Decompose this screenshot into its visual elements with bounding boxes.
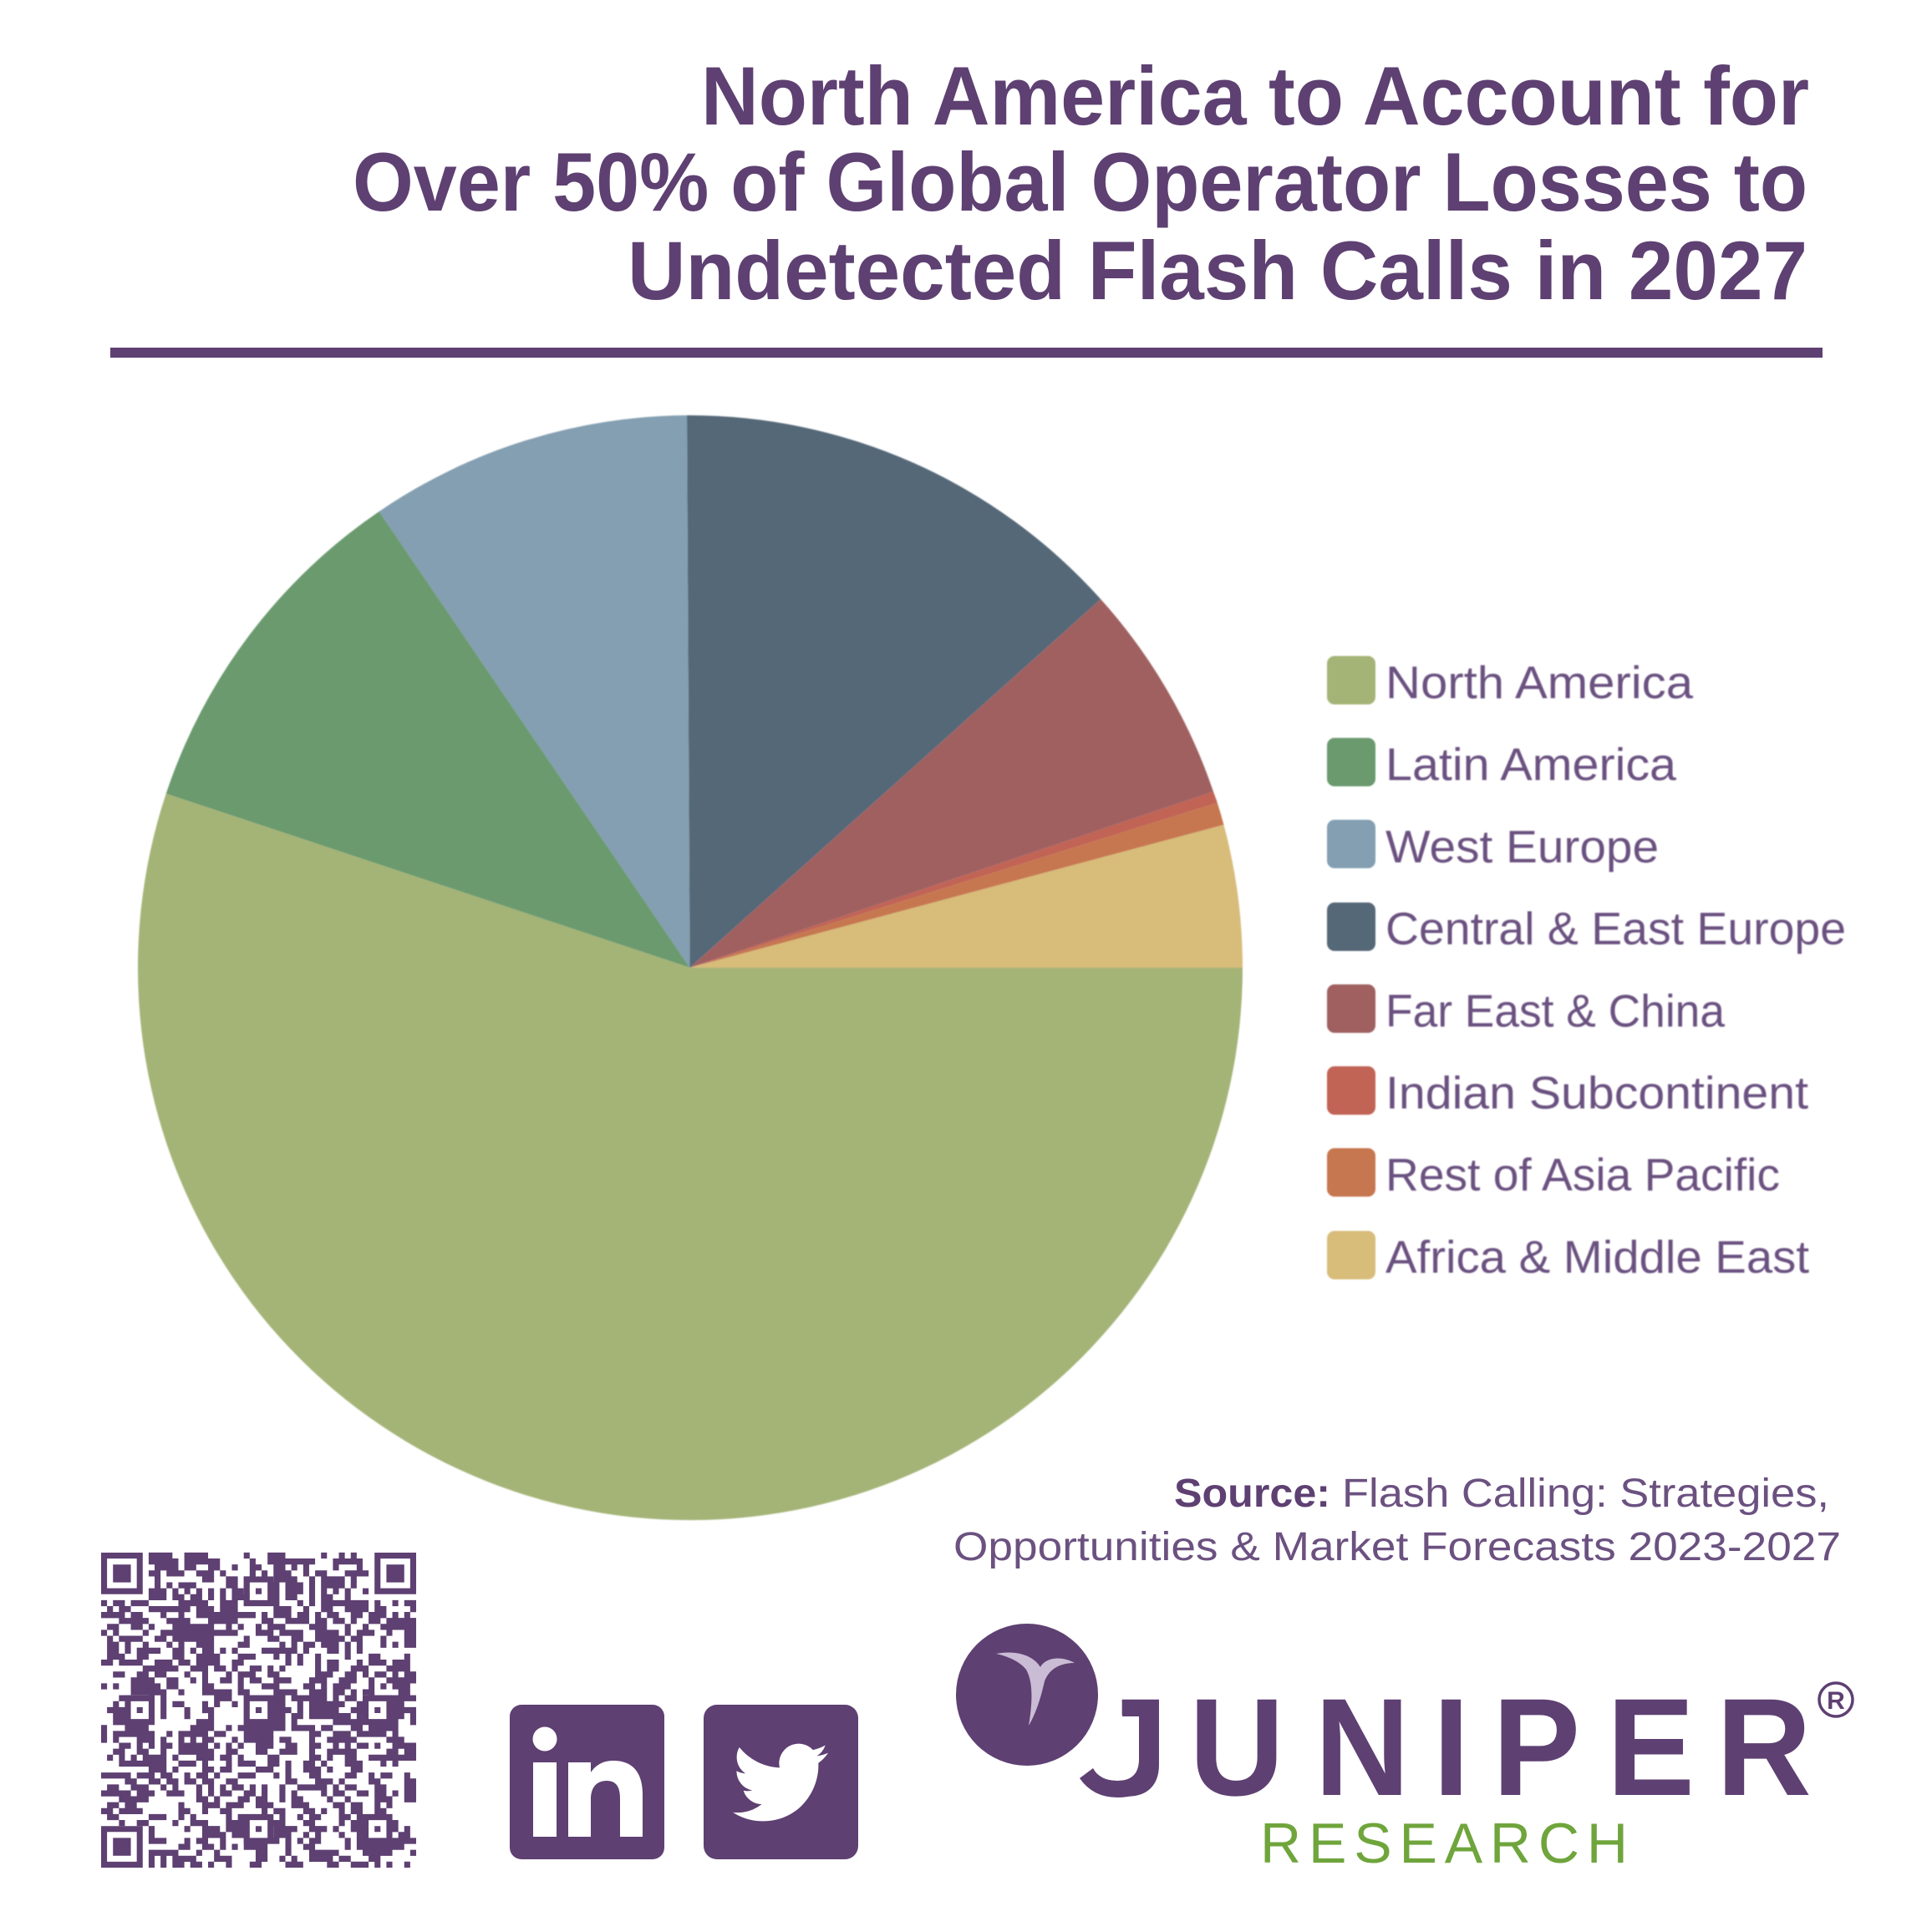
- legend item: North America: North America: [1385, 657, 1693, 709]
- legend: [1327, 656, 1846, 1283]
- legend item: Rest of Asia Pacific: Rest of Asia Pacific: [1385, 1149, 1780, 1201]
- legend item: Far East & China: Far East & China: [1385, 984, 1725, 1036]
- title: Undetected Flash Calls in 2027: [628, 224, 1807, 317]
- legend item: West Europe: West Europe: [1385, 821, 1659, 872]
- title: North America to Account for: [701, 49, 1809, 142]
- wordmark: RESEARCH: RESEARCH: [1260, 1812, 1628, 1875]
- legend item: Indian Subcontinent: Indian Subcontinent: [1385, 1066, 1808, 1118]
- pie chart: [138, 415, 1243, 1520]
- logo: Juniper Research: [956, 1624, 1853, 1875]
- slice: West Europe: [379, 415, 690, 968]
- title: Over 50% of Global Operator Losses to: [353, 135, 1807, 228]
- icon: LinkedIn: [510, 1705, 664, 1859]
- legend item: Africa & Middle East: Africa & Middle East: [1385, 1231, 1809, 1283]
- slice: Indian Subcontinent: [690, 791, 1218, 968]
- slice: Latin America: [166, 511, 689, 968]
- registered mark: [1819, 1683, 1853, 1716]
- icon: Twitter: [704, 1705, 858, 1859]
- source note: Flash Calling: Strategies,: [1342, 1472, 1829, 1516]
- slice: Africa & Middle East: [690, 825, 1243, 968]
- J flag and hook accent: [1080, 1700, 1157, 1797]
- slice: Central & East Europe: [687, 415, 1101, 968]
- source note: [953, 1472, 1841, 1569]
- title: [353, 49, 1809, 317]
- QR code: [101, 1553, 416, 1868]
- title rule: [110, 348, 1823, 358]
- logo emblem: [956, 1624, 1098, 1766]
- slice: Far East & China: [690, 599, 1213, 968]
- legend item: Latin America: Latin America: [1385, 739, 1676, 791]
- slice: North America: [138, 794, 1243, 1520]
- slice: Rest of Asia Pacific: [690, 803, 1223, 968]
- J counter cleanup: [1093, 1738, 1139, 1781]
- legend item: Central & East Europe: Central & East Europe: [1385, 902, 1846, 954]
- source note: Source:: [1174, 1472, 1330, 1516]
- source note: Opportunities & Market Forecasts 2023-2027: [953, 1525, 1841, 1569]
- wordmark: JUNIPER: JUNIPER: [1095, 1670, 1812, 1825]
- registered mark: R: [1827, 1687, 1845, 1715]
